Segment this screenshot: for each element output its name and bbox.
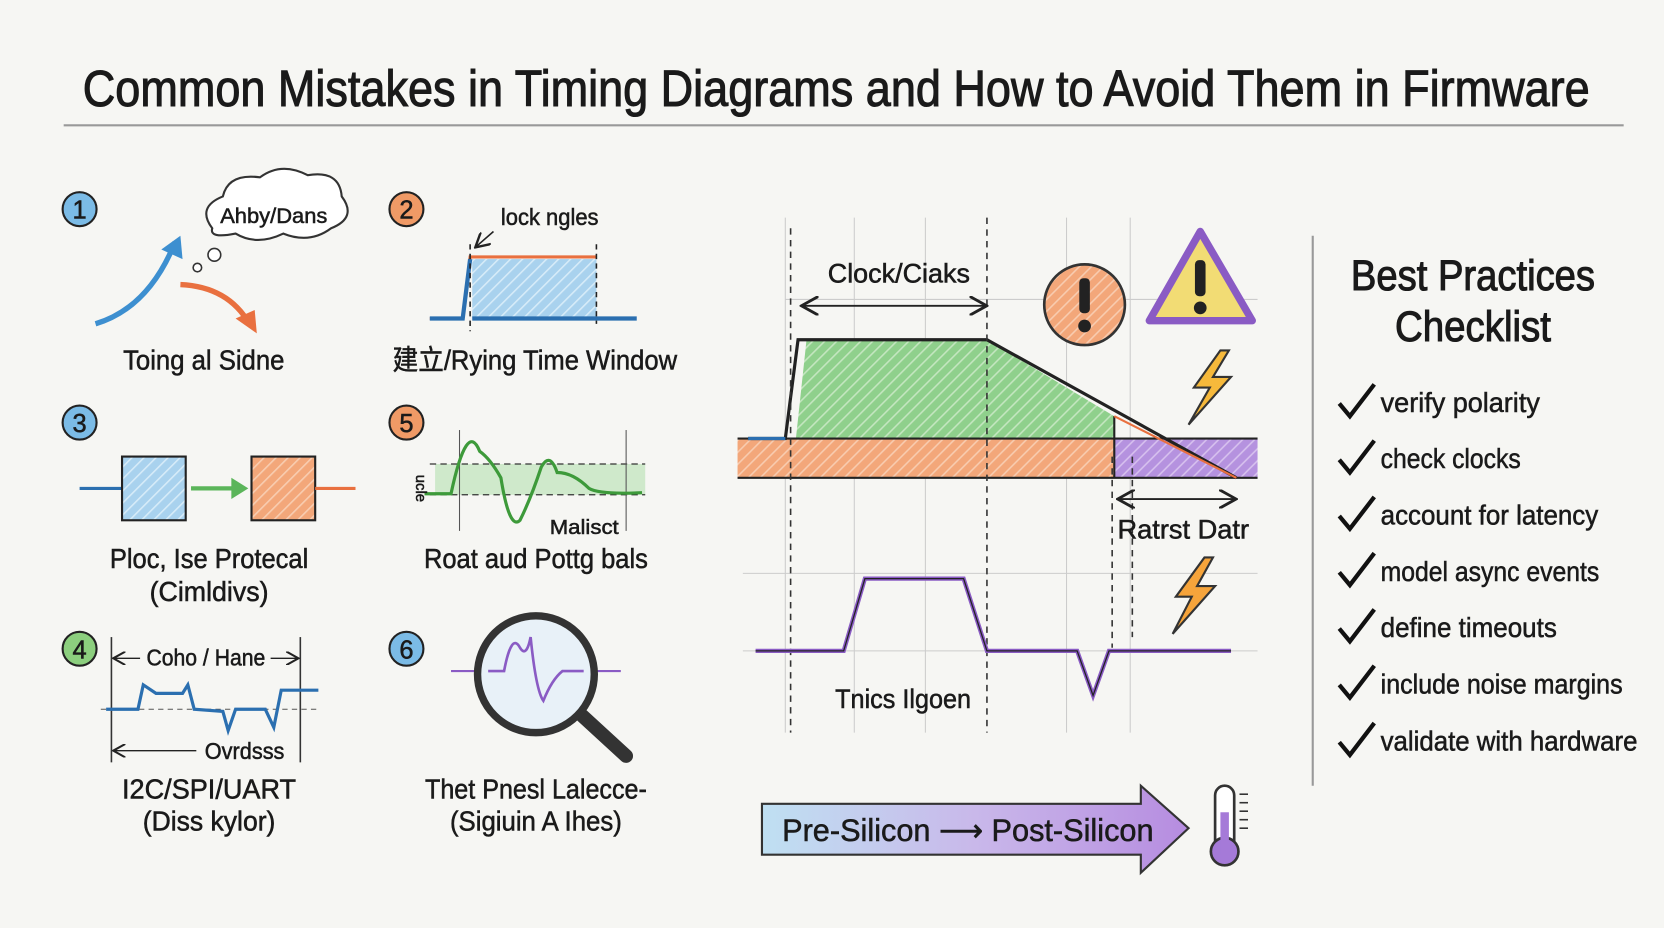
central timing chart: [738, 218, 1258, 733]
checklist heading: [1351, 252, 1595, 350]
label: (Sigiuin A Ihes): [450, 805, 622, 836]
label: Ploc, Ise Protecal: [110, 543, 308, 574]
noise wave: Malisct: [550, 517, 619, 539]
label: [122, 773, 296, 836]
icon: warning triangle: [1149, 231, 1252, 321]
clock label: Clock/Ciaks: [828, 258, 970, 288]
label: I2C/SPI/UART: [122, 773, 296, 804]
badge 5: 5: [399, 410, 414, 438]
checklist items: check clocks: [1381, 443, 1521, 474]
purple wave: [756, 579, 1231, 714]
label: Roat aud Pottg bals: [424, 543, 648, 574]
panel 3: protocol: [63, 406, 356, 607]
noise wave: ucle: [412, 475, 428, 502]
signal band: [738, 340, 1258, 478]
panel 4: bus: [63, 632, 318, 836]
label: (Diss kylor): [143, 805, 275, 836]
badge 3: [63, 406, 97, 440]
checklist items: account for latency: [1381, 500, 1598, 531]
checklist items: define timeouts: [1381, 612, 1557, 643]
bus wave: Coho / Hane: [146, 645, 265, 671]
checklist items: [1339, 384, 1637, 757]
arrow: pre to post silicon: [762, 786, 1189, 873]
checklist items: validate with hardware: [1381, 726, 1637, 757]
waveform: [430, 204, 637, 331]
badge 2: [389, 192, 423, 226]
grid: [743, 218, 1258, 733]
badge 3: 3: [73, 410, 87, 438]
badge 4: 4: [73, 636, 87, 664]
checklist heading: Best Practices: [1351, 252, 1595, 299]
badge 5: [389, 406, 423, 440]
checklist items: verify polarity: [1381, 387, 1540, 418]
icon: thermometer: [1211, 786, 1248, 865]
label: [110, 543, 308, 607]
arrow: pre to post silicon: Pre-Silicon ⟶ Post-Silicon: [782, 812, 1154, 848]
cloud: Ahby/Dans: [220, 205, 327, 228]
timing label: Ratrst Datr: [1117, 514, 1249, 544]
blocks: [80, 457, 356, 520]
badge 1: 1: [73, 197, 87, 225]
noise wave: [412, 430, 645, 539]
label: 建立/Rying Time Window: [393, 344, 677, 376]
panel 5: noise: [389, 406, 648, 574]
label: [425, 773, 647, 836]
dashed markers: [791, 218, 1132, 733]
checklist items: include noise margins: [1381, 668, 1623, 699]
arrows: [96, 236, 257, 333]
waveform: lock ngles: [501, 204, 599, 230]
badge 6: 6: [399, 636, 414, 664]
bus wave: Ovrdsss: [205, 738, 284, 764]
panel: best practices checklist: [1339, 252, 1637, 757]
checklist heading: Checklist: [1395, 303, 1551, 350]
divider: [1312, 236, 1314, 786]
cloud: [193, 169, 348, 272]
icon: lightning 1: [1189, 350, 1231, 425]
panel 1: timing: [63, 169, 348, 376]
panel 2: setup window: [389, 192, 677, 376]
timing label: [1117, 499, 1249, 544]
label: (Cimldivs): [150, 576, 268, 607]
badge 4: [63, 632, 97, 666]
badge 6: [389, 632, 423, 666]
checklist items: model async events: [1381, 556, 1599, 587]
panel 6: analyzer: [389, 616, 647, 836]
badge 2: 2: [399, 197, 414, 225]
icon: error circle: [1044, 264, 1125, 345]
bus wave: [101, 637, 318, 764]
label: Thet Pnesl Lalecce-: [425, 773, 647, 804]
badge 1: [63, 192, 97, 226]
label: Toing al Sidne: [123, 344, 284, 376]
icon: lightning 2: [1173, 557, 1215, 634]
magnifier: [451, 616, 626, 756]
purple wave: Tnics Ilgoen: [835, 684, 971, 714]
